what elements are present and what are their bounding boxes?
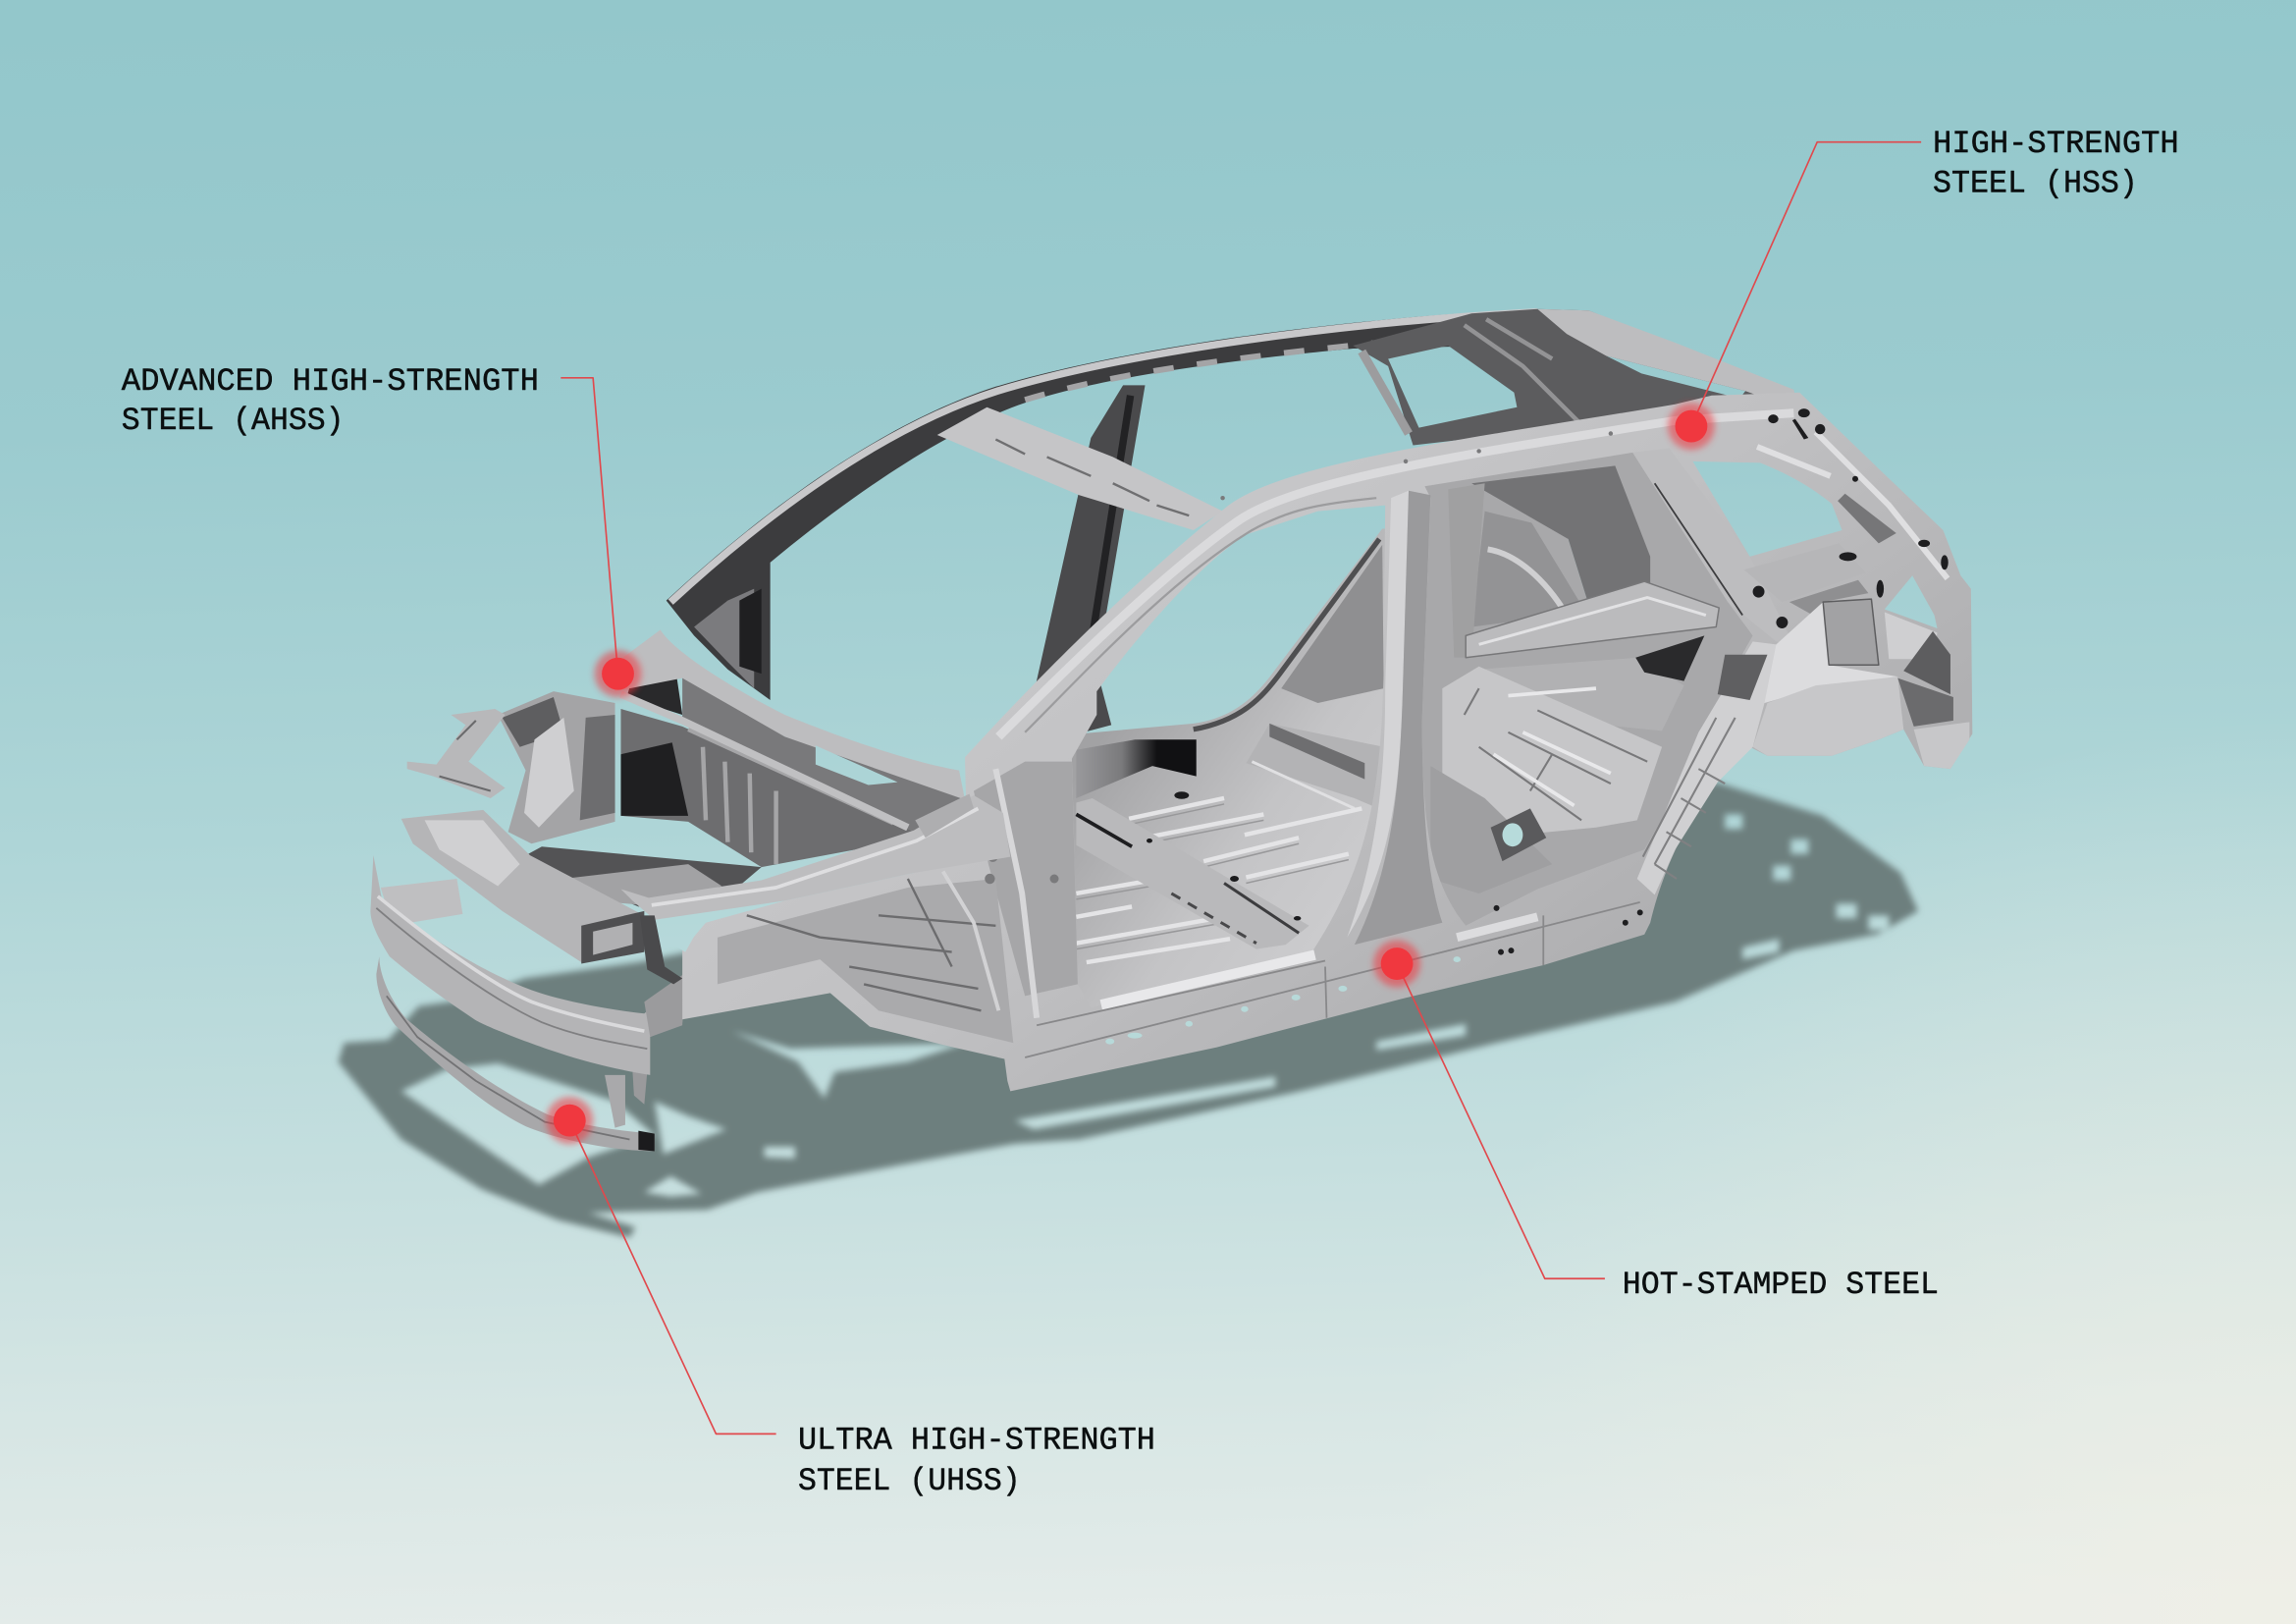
rear ring pressed highlight (1757, 432, 1948, 578)
body holes upper rear (1494, 408, 1949, 955)
far B-pillar (1036, 385, 1146, 732)
strut brace bar (620, 694, 908, 828)
firewall upper panel (682, 678, 965, 835)
hotspot AHSS (595, 650, 641, 697)
dark under-shelf cavity (1635, 635, 1704, 681)
rear sill highlight (1457, 917, 1537, 938)
leader line hot-stamped (1397, 964, 1605, 1278)
dark upper cowl pocket (626, 646, 682, 715)
darker inner panel (1789, 580, 1868, 616)
C-pillar diagonal (1632, 448, 1793, 644)
far wheelhouse (1471, 512, 1586, 626)
rear bracket bottom (1914, 722, 1969, 769)
radiator cross member (401, 810, 644, 964)
gap behind cowl (816, 745, 897, 785)
near upper shotgun rail (620, 795, 1010, 920)
fender creases (747, 879, 995, 1010)
rear ring dark band (1838, 494, 1896, 543)
engine bay light panel (563, 864, 721, 905)
label HSS: HIGH-STRENGTH (1933, 126, 2179, 162)
far side roof rail and A-pillar (667, 309, 1537, 700)
far roof rear rail (1537, 309, 1798, 410)
hotspot UHSS (546, 1097, 593, 1144)
label UHSS (798, 1422, 1155, 1499)
wheel tub lower (1753, 677, 1903, 756)
firewall ribs (688, 730, 893, 864)
callout: high-strength steel (1668, 126, 2179, 450)
leader line UHSS (569, 1120, 776, 1434)
spare wheel well (1491, 808, 1546, 861)
drain port (1502, 823, 1522, 846)
leader line HSS (1691, 142, 1921, 426)
headlight bracket (407, 709, 506, 798)
dark wheel well hollow (620, 742, 688, 816)
rear floor (1442, 658, 1683, 842)
far rocker band (1076, 739, 1197, 798)
sill slots (1105, 956, 1461, 1045)
far quarter upper panel (1471, 465, 1650, 605)
car body-in-white (122, 126, 2179, 1499)
floor cross member (1076, 798, 1309, 949)
strut tower (498, 691, 615, 843)
wheel tub dome (1823, 599, 1879, 665)
floor holes (1147, 791, 1301, 921)
near roof rail highlight (998, 413, 1793, 736)
raised storage box (1430, 766, 1552, 893)
panel below rear window (1744, 543, 1865, 602)
label HSS (1933, 126, 2179, 201)
fender panel (718, 879, 1013, 1043)
far rear quarter and C-pillar (1353, 309, 1793, 445)
far rear panel (1885, 613, 1938, 659)
sill highlight (1101, 955, 1315, 1004)
rear arch ladder (1637, 641, 1776, 894)
firewall and apron wall (620, 709, 920, 867)
label hot-stamped: HOT-STAMPED STEEL (1623, 1267, 1939, 1303)
rear wheel tub front (1750, 602, 1897, 703)
B-pillar shading (1347, 491, 1442, 945)
front bumper beams and brackets (370, 855, 684, 1151)
far wall diagonal shade (1194, 539, 1379, 730)
raised seat panel (1246, 724, 1406, 820)
gap under shotgun rail (655, 915, 706, 952)
label HSS: STEEL (HSS) (1933, 165, 2138, 201)
hotspot HSS (1668, 403, 1715, 450)
leader line AHSS (561, 378, 618, 674)
front rail dark joint (640, 915, 682, 984)
label UHSS: ULTRA HIGH-STRENGTH (798, 1422, 1155, 1458)
rail gusset (915, 794, 974, 838)
car shadow on ground (339, 783, 1918, 1237)
interior floor front and far wall (1069, 529, 1406, 1013)
label AHSS: ADVANCED HIGH-STRENGTH (122, 363, 539, 400)
rear door opening interior (1413, 451, 1757, 930)
hotspot hot-stamped (1373, 941, 1420, 987)
label UHSS: STEEL (UHSS) (798, 1463, 1021, 1499)
rear parcel shelf (1466, 581, 1719, 658)
door hinge pillar shade (974, 762, 1078, 996)
near rail shade line (1025, 498, 1376, 732)
roof cross member (937, 407, 1223, 530)
fender arch (943, 872, 998, 1010)
B-pillar back rib (1448, 483, 1485, 658)
body rivet holes near (985, 431, 1613, 884)
rear dark inner upper (1903, 631, 1950, 694)
near side body panel (682, 393, 1972, 1091)
label AHSS: STEEL (AHSS) (122, 403, 345, 439)
front floor stripes (1076, 798, 1362, 962)
far wall side panel (1281, 545, 1384, 703)
hinge pillar bright strip (995, 769, 1037, 1018)
callout: advanced high-strength steel (122, 363, 641, 697)
cowl top bar (615, 629, 965, 799)
sill grooves (1025, 902, 1640, 1057)
rear dark inner lower (1897, 678, 1953, 727)
callout: ultra high-strength steel (546, 1097, 1155, 1499)
callout: hot-stamped steel (1373, 941, 1939, 1303)
label AHSS (122, 363, 539, 439)
engine bay floor (526, 846, 762, 906)
